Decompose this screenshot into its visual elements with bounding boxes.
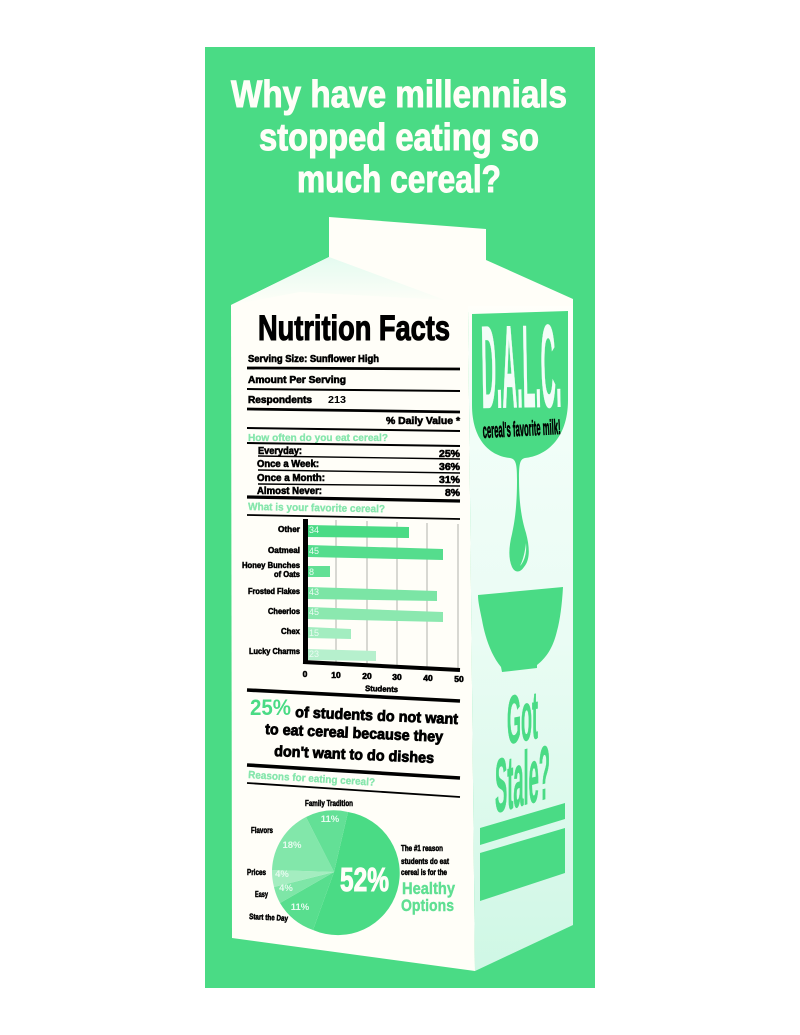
side stripes [480, 803, 565, 901]
section: reasons for eating cereal: Reasons for eating cereal? [248, 769, 375, 789]
slice: healthy options 52% [313, 812, 400, 935]
title: stopped eating so [259, 117, 539, 159]
carton front panel [231, 305, 475, 971]
axis numbers: 10 [331, 670, 341, 680]
drip shape [472, 311, 568, 572]
section heading: favorite cereal: What is your favorite cereal? [248, 501, 385, 515]
icon: cereal bowl [478, 587, 563, 672]
bar chart: favorite cereal [242, 519, 464, 694]
category labels: Lucky Charms [249, 647, 301, 656]
text: Got [507, 676, 538, 759]
category labels: Other [278, 525, 300, 534]
slice: easy 4% [274, 872, 334, 903]
bar values [309, 525, 319, 659]
slice values [275, 814, 340, 913]
side label: milk drip [472, 301, 568, 572]
title [231, 74, 567, 201]
bar values: 45 [309, 607, 319, 617]
pie callout: healthy options: students do eat [401, 857, 449, 866]
pie labels: Flavors [251, 826, 273, 835]
axis numbers: 40 [423, 673, 433, 683]
pie callout: healthy options: Healthy [402, 879, 455, 898]
category labels: Cheerios [268, 607, 301, 616]
section: how often do you eat cereal: How often do you eat cereal? [248, 432, 388, 444]
callout: 25% dishes: don't want to do dishes [274, 743, 434, 767]
callout: 25% dishes: 25% [250, 695, 291, 720]
callout: 25% dishes: of students do not want [295, 704, 458, 728]
axis title: Students [365, 684, 399, 694]
nutrition facts header rows [247, 354, 460, 431]
carton side panel [468, 306, 573, 971]
nutrition facts header rows: 213 [328, 395, 346, 406]
pie callout: healthy options: Options [401, 896, 454, 915]
background panel [205, 47, 595, 988]
pie labels: Easy [255, 890, 268, 899]
slice values: 18% [282, 840, 302, 851]
slice values: 4% [275, 869, 289, 880]
divider above callout [247, 690, 460, 701]
bars [308, 525, 443, 661]
axis numbers: 0 [303, 669, 308, 679]
section: how often do you eat cereal: Everyday: [258, 446, 302, 457]
title: Why have millennials [231, 74, 567, 116]
section: how often do you eat cereal: Almost Never: [257, 486, 322, 497]
section: how often do you eat cereal: Once a Month: [257, 473, 325, 484]
bar values: 43 [309, 587, 319, 597]
carton top tab [329, 217, 486, 262]
axes [303, 519, 460, 670]
heading: Nutrition Facts: Nutrition Facts [258, 309, 450, 348]
callout: 25% dishes [250, 695, 458, 767]
bar values: 23 [309, 649, 319, 659]
nutrition facts header rows: Respondents [248, 395, 312, 406]
slice values: 11% [291, 902, 310, 913]
pie chart: reasons [272, 810, 400, 935]
drop highlight [520, 543, 526, 566]
category labels [242, 525, 301, 656]
category labels: of Oats [274, 570, 301, 579]
axis numbers [303, 669, 464, 684]
bar values: 45 [309, 546, 319, 556]
title: much cereal? [297, 159, 501, 201]
pie labels: Prices [247, 868, 266, 877]
pie labels [247, 799, 353, 923]
bar values: 15 [309, 628, 319, 638]
slice: prices 4% [272, 870, 334, 887]
bar values: 34 [309, 525, 319, 535]
nutrition facts header rows: % Daily Value * [386, 416, 460, 427]
slogan: Got Stale? [495, 676, 550, 830]
pie labels: Start the Day [249, 912, 289, 923]
axis numbers: 50 [454, 674, 464, 684]
category labels: Chex [281, 627, 301, 636]
slice values: 11% [321, 814, 340, 825]
pie callout: healthy options: cereal is for the [401, 868, 447, 877]
text: cereal's favorite milk! [482, 416, 561, 443]
pie labels: Family Tradition [305, 799, 353, 808]
section: how often do you eat cereal: 36% [439, 462, 460, 473]
carton roof [231, 257, 573, 312]
divider below favorite cereal heading [247, 515, 460, 519]
pie callout: healthy options [401, 844, 455, 915]
section: how often do you eat cereal: Once a Week: [257, 459, 319, 470]
text: Stale? [495, 730, 550, 830]
bar values: 8 [309, 567, 314, 577]
section: how often do you eat cereal: 8% [445, 488, 460, 499]
slice value 52%: 52% [340, 861, 389, 898]
nutrition facts header rows: Serving Size: Sunflower High [248, 354, 379, 365]
pie callout: healthy options: The #1 reason [401, 844, 443, 853]
slice: start the day 11% [280, 872, 334, 930]
category labels: Frosted Flakes [248, 587, 301, 596]
slice values: 4% [279, 883, 293, 894]
section: reasons for eating cereal [247, 765, 460, 797]
nutrition facts header rows: Amount Per Serving [248, 375, 346, 386]
axis numbers: 30 [392, 672, 402, 682]
section: how often do you eat cereal: 31% [439, 475, 460, 486]
slice: flavors 18% [272, 817, 334, 872]
slice: family tradition 11% [306, 810, 348, 872]
section: how often do you eat cereal: 25% [439, 449, 460, 460]
category labels: Honey Bunches [242, 561, 301, 570]
section: how often do you eat cereal [247, 432, 460, 501]
axis numbers: 20 [362, 671, 372, 681]
roof shading [231, 257, 445, 305]
milk carton [231, 217, 573, 971]
category labels: Oatmeal [268, 546, 300, 555]
callout: 25% dishes: to eat cereal because they [265, 721, 444, 746]
